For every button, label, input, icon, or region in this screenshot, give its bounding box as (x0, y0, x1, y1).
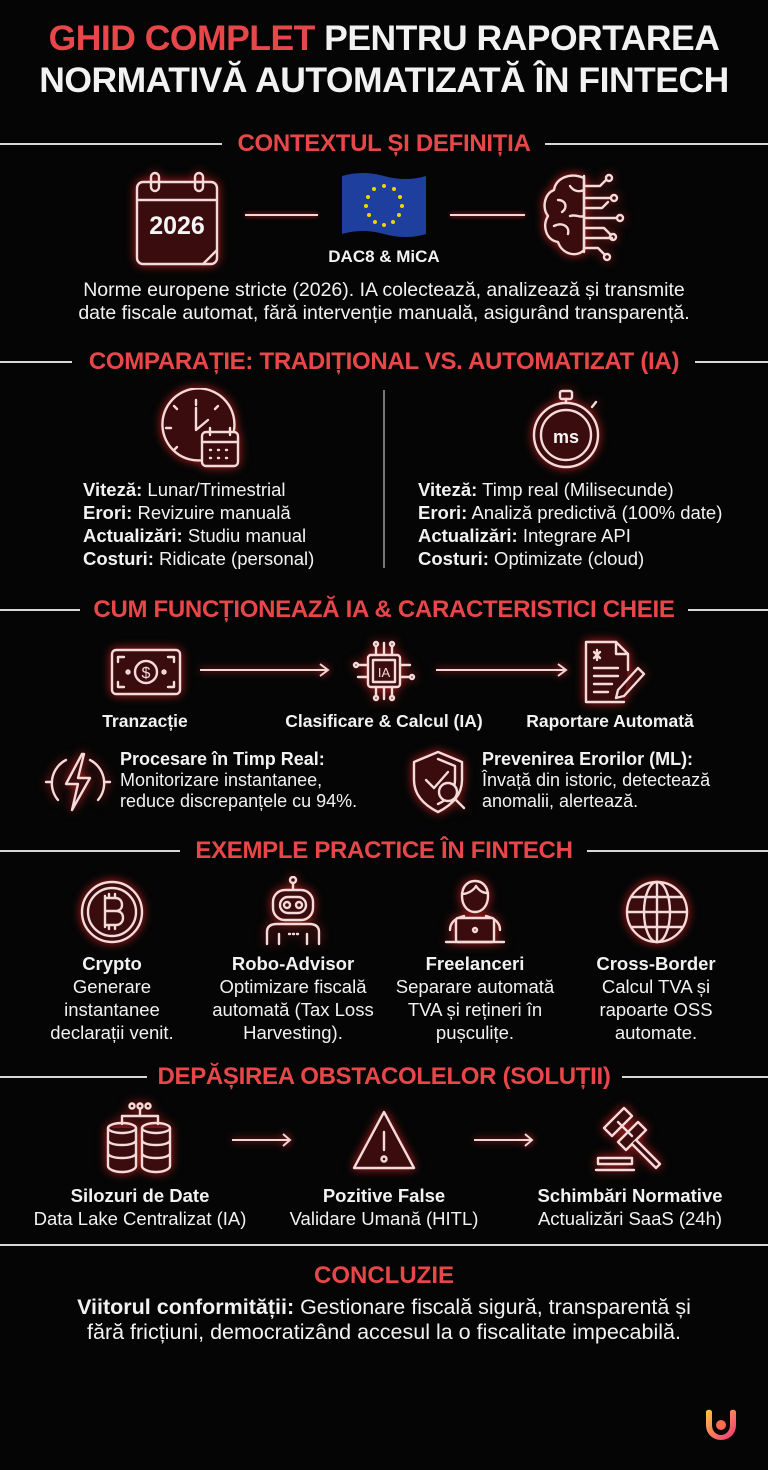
text: declarații venit. (50, 1022, 174, 1043)
text: Învață din istoric, detectează (482, 770, 710, 790)
text (396, 953, 554, 1043)
text: Optimizare fiscală (219, 976, 366, 997)
text: reduce discrepanțele cu 94%. (120, 791, 357, 811)
text: automated attributes: Erori: Analiză predictivă (100% date) (418, 502, 722, 523)
connector (245, 214, 318, 216)
text: Robo-Advisor (232, 953, 354, 974)
text: Raportare Automată (526, 711, 694, 731)
text: automate. (615, 1022, 697, 1043)
text: pușculițe. (436, 1022, 514, 1043)
text: TVA și rețineri în (408, 999, 542, 1020)
text: automated attributes (418, 479, 722, 569)
example: freelanceri (396, 872, 554, 1043)
text (596, 953, 716, 1043)
heading: cum functioneaza: CUM FUNCȚIONEAZĂ IA & CARACTERISTICI CHEIE (93, 596, 675, 623)
text: traditional attributes: Costuri: Ridicate (personal) (83, 548, 314, 569)
feature: error prevention (405, 744, 710, 820)
text (212, 953, 374, 1043)
text: Generare (73, 976, 151, 997)
example: robo-advisor (212, 870, 374, 1043)
icon: stopwatch ms: ms (553, 427, 579, 447)
heading: obstacole: DEPĂȘIREA OBSTACOLELOR (SOLUȚII) (157, 1063, 611, 1090)
panel: automatizat (418, 383, 722, 569)
text: Pozitive False (323, 1185, 445, 1206)
text: conclusion: fără fricțiuni, democratizând accesul la o fiscalitate impecabilă. (87, 1320, 681, 1344)
logo (703, 1407, 739, 1441)
icon: bitcoin (74, 874, 150, 950)
icon: AI chip (348, 636, 420, 706)
text: Schimbări Normative (537, 1185, 723, 1206)
text (482, 749, 710, 811)
text: Prevenirea Erorilor (ML): (482, 749, 693, 769)
text (50, 953, 174, 1043)
arrow (433, 660, 572, 680)
icon: warning (350, 1108, 418, 1172)
icon: gavel (594, 1104, 666, 1172)
text: instantanee (64, 999, 160, 1020)
icon: money transaction: $ (142, 665, 151, 682)
icon: lightning (41, 748, 115, 815)
text: conclusion (0, 1295, 768, 1345)
text: Separare automată (396, 976, 554, 997)
icon: calendar 2026: 2026 (149, 212, 205, 240)
text: automated attributes: Costuri: Optimizate (cloud) (418, 548, 644, 569)
icon: databases (104, 1102, 176, 1174)
text: Validare Umană (HITL) (290, 1208, 478, 1229)
text: Actualizări SaaS (24h) (538, 1208, 722, 1229)
text (120, 749, 357, 811)
icon: money transaction (103, 641, 189, 703)
text: Data Lake Centralizat (IA) (34, 1208, 246, 1229)
text: Procesare în Timp Real: (120, 749, 325, 769)
heading: concluzie: CONCLUZIE (314, 1262, 454, 1289)
text: context description: date fiscale automat, fără intervenție manuală, asigurând transparență. (78, 302, 690, 324)
solution: normative changes (520, 1100, 740, 1230)
text: automată (Tax Loss (212, 999, 374, 1020)
text (520, 1184, 740, 1230)
text: rapoarte OSS (599, 999, 713, 1020)
text: Clasificare & Calcul (IA) (285, 711, 483, 731)
text: automated attributes: Viteză: Timp real (Milisecunde) (418, 479, 674, 500)
heading: exemple: EXEMPLE PRACTICE ÎN FINTECH (195, 837, 573, 864)
icon: AI brain (536, 167, 630, 266)
text: automated attributes: Actualizări: Integrare API (418, 525, 631, 546)
icon: robot (259, 870, 327, 948)
heading: contextul: CONTEXTUL ȘI DEFINIȚIA (238, 130, 530, 157)
example: cross-border (596, 874, 716, 1043)
arrow (232, 1132, 294, 1148)
panel: traditional (83, 380, 314, 569)
text (20, 1184, 260, 1230)
icon: stopwatch ms (526, 383, 606, 476)
text: Freelanceri (426, 953, 524, 974)
text: Monitorizare instantanee, (120, 770, 322, 790)
arrow (197, 660, 334, 680)
text (274, 1184, 494, 1230)
text: anomalii, alertează. (482, 791, 638, 811)
text: traditional attributes (83, 479, 314, 569)
text: context description: Norme europene stricte (2026). IA colectează, analizează și transmite (83, 279, 685, 301)
text: Harvesting). (243, 1022, 343, 1043)
icon: EU flag (342, 173, 426, 237)
solution: data silos (34, 1096, 246, 1229)
icon: AI chip: IA (378, 665, 390, 680)
example: crypto (50, 874, 174, 1043)
text: Calcul TVA și (602, 976, 710, 997)
icon: shield magnifier (405, 744, 471, 820)
text: Crypto (82, 953, 142, 974)
connector (450, 214, 525, 216)
icon: clock calendar (154, 380, 247, 475)
title: NORMATIVĂ AUTOMATIZATĂ ÎN FINTECH (39, 60, 729, 100)
icon: person laptop (442, 872, 508, 951)
title (39, 18, 729, 100)
labels: process steps: Tranzacție (102, 711, 188, 731)
feature: real-time processing (41, 748, 357, 815)
text: traditional attributes: Viteză: Lunar/Trimestrial (83, 479, 286, 500)
solution: false positives (274, 1100, 494, 1230)
heading: comparatie: COMPARAȚIE: TRADIȚIONAL VS. AUTOMATIZAT (IA) (89, 348, 679, 375)
text: Cross-Border (596, 953, 716, 974)
text: conclusion: Viitorul conformității: Gestionare fiscală sigură, transparentă și (77, 1295, 691, 1319)
text: Silozuri de Date (71, 1185, 209, 1206)
icon: report document (577, 633, 650, 711)
text: traditional attributes: Actualizări: Studiu manual (83, 525, 306, 546)
icon: globe (618, 874, 696, 950)
arrow (474, 1132, 536, 1148)
text: traditional attributes: Erori: Revizuire manuală (83, 502, 291, 523)
text: context description (78, 279, 690, 324)
icon: calendar 2026 (128, 166, 226, 273)
label: DAC8 & MiCA: DAC8 & MiCA (328, 247, 440, 266)
title: GHID COMPLET PENTRU RAPORTAREA (49, 18, 719, 58)
